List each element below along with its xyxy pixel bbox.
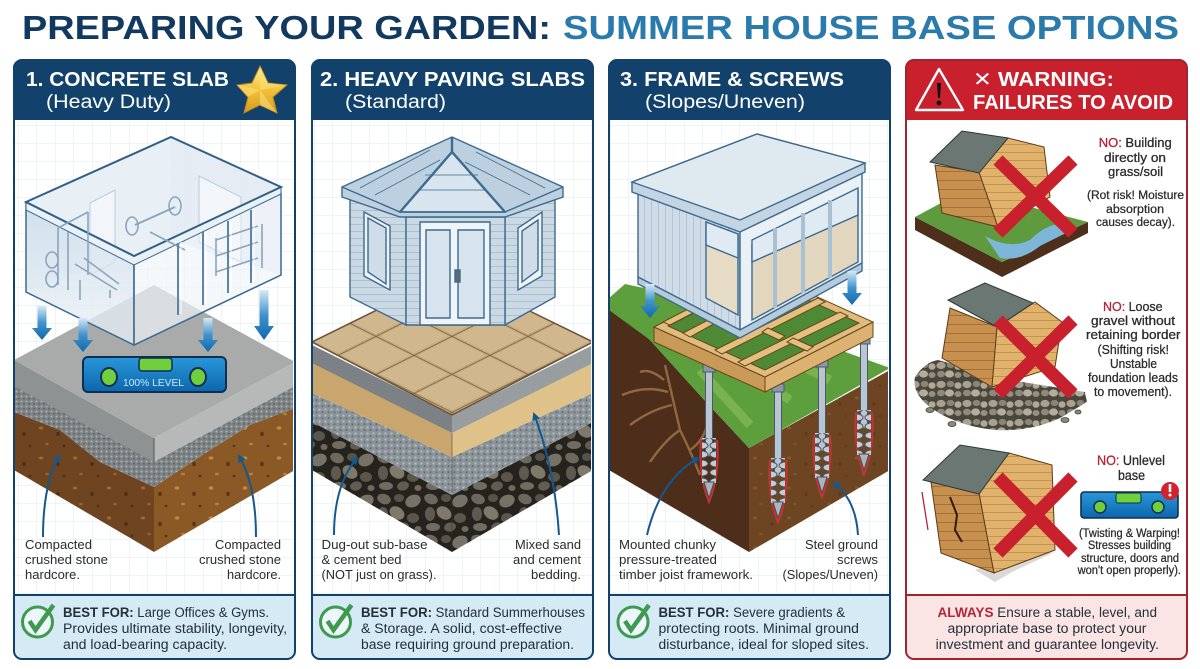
- text: failure two: retaining border: [1086, 327, 1181, 342]
- icon: green check: [618, 605, 649, 637]
- heading: paving slabs: (Standard): [345, 92, 446, 113]
- footer: always: investment and guarantee longevity.: [936, 637, 1159, 653]
- heading: frame and screws: 3. FRAME & SCREWS: [620, 69, 844, 91]
- footer: best for: base requiring ground preparation.: [361, 637, 574, 653]
- text: failure two: Unstable: [1110, 357, 1157, 371]
- panel: warning failures: [906, 60, 1187, 659]
- text: failure one: absorption: [1106, 204, 1164, 216]
- text: failure three heading: NO: Unlevel: [1097, 452, 1170, 468]
- footer: best for: [609, 595, 890, 659]
- illustration: corner summerhouse: [342, 137, 563, 325]
- callout arrows: [334, 414, 559, 535]
- text: right callout: screws: [837, 552, 879, 567]
- footer: best for: BEST FOR: Standard Summerhouses: [361, 605, 597, 621]
- title: [22, 9, 1179, 46]
- text: failure one: grass/soil: [1108, 164, 1163, 179]
- illustration: shed on loose gravel: [914, 283, 1087, 430]
- text: failure one: causes decay).: [1096, 217, 1175, 229]
- illustration: timber frame: [654, 272, 873, 392]
- panel: heavy paving slabs: [311, 60, 593, 659]
- icon: gold star: [237, 66, 287, 113]
- text: left callout: timber joist framework.: [619, 567, 753, 582]
- icon: unlevel spirit level: [1081, 482, 1179, 518]
- footer: best for: BEST FOR: Large Offices & Gyms.: [63, 605, 280, 621]
- illustration: ground screws: [700, 332, 873, 522]
- text: failure three: structure, doors and: [1081, 553, 1179, 565]
- text: failure two: to movement).: [1094, 385, 1172, 399]
- text: failure one: [1087, 135, 1184, 229]
- text: failure one: (Rot risk! Moisture: [1087, 190, 1184, 202]
- footer: always: ALWAYS Ensure a stable, level, and: [938, 605, 1165, 621]
- callout arrows: [43, 456, 256, 537]
- heading: frame and screws: [608, 60, 890, 120]
- text: right callout: (Slopes/Uneven): [782, 567, 878, 582]
- callout arrows: [647, 458, 858, 535]
- heading: warning: FAILURES TO AVOID: [973, 92, 1173, 114]
- heading: warning: [906, 60, 1187, 120]
- back wall window and door: [90, 176, 241, 275]
- icon: red cross: [998, 320, 1073, 394]
- icon: green check: [22, 605, 54, 637]
- gym equipment: [46, 197, 262, 300]
- text: right callout: Compacted: [215, 537, 281, 552]
- text: left callout: (NOT just on grass).: [322, 567, 436, 582]
- text: right callout: and cement: [513, 552, 581, 567]
- text: failure three: won't open properly).: [1077, 565, 1181, 577]
- text: failure three: (Twisting & Warping!: [1079, 528, 1180, 540]
- text: right callout: hardcore.: [227, 567, 281, 582]
- illustration: flat roof garden room: [632, 134, 865, 338]
- heading: paving slabs: 2. HEAVY PAVING SLABS: [320, 69, 585, 91]
- illustration: concrete slab layers: [14, 285, 295, 552]
- text: failure three heading: base: [1118, 467, 1145, 483]
- text: left callout: hardcore.: [25, 567, 80, 582]
- title: SUMMER HOUSE BASE OPTIONS: [563, 9, 1179, 46]
- icon: green check: [320, 605, 352, 637]
- footer: always: [906, 595, 1187, 659]
- text: failure two: gravel without: [1091, 313, 1175, 328]
- text: left callout: Mounted chunky: [619, 537, 716, 552]
- illustration: paving layers: [313, 310, 591, 552]
- footer: best for: [312, 595, 593, 659]
- heading: concrete slab: (Heavy Duty): [46, 92, 171, 113]
- footer: best for: & Storage. A solid, cost-effective: [361, 621, 562, 637]
- icon: spirit level: 100% LEVEL: [123, 378, 184, 389]
- illustration: shed on grass: [915, 131, 1088, 277]
- panel: frame and screws: [608, 60, 890, 659]
- heading: paving slabs: [311, 60, 593, 120]
- panel: concrete slab: [13, 60, 295, 659]
- text: right callout: crushed stone: [199, 552, 281, 567]
- text: failure two: (Shifting risk!: [1098, 343, 1169, 357]
- text: right callout: Steel ground: [805, 537, 878, 552]
- text: right callout: Mixed sand: [515, 537, 581, 552]
- icon: red cross: [998, 477, 1073, 553]
- heading: frame and screws: (Slopes/Uneven): [645, 92, 805, 113]
- text: left callout: pressure-treated: [619, 552, 717, 567]
- footer: best for: disturbance, ideal for sloped sites.: [658, 637, 869, 653]
- icon: warning triangle: [916, 69, 963, 110]
- text: left callout: Dug-out sub-base: [322, 537, 428, 552]
- footer: always: appropriate base to protect your: [948, 621, 1147, 637]
- glass mullions: [178, 210, 251, 315]
- heading: concrete slab: 1. CONCRETE SLAB: [26, 69, 229, 91]
- illustration: shed on unlevel base: [922, 445, 1055, 582]
- footer: best for: and load-bearing capacity.: [63, 637, 227, 653]
- footer: best for: [14, 595, 295, 659]
- text: failure two: foundation leads: [1088, 371, 1178, 385]
- illustration: sloped ground: [609, 284, 890, 552]
- footer: best for: protecting roots. Minimal ground: [658, 621, 859, 637]
- text: failure three: Stresses building: [1088, 540, 1171, 552]
- text: failure one: directly on: [1104, 150, 1166, 165]
- text: failure two: NO: Loose: [1103, 299, 1164, 314]
- text: left callout: Compacted: [25, 537, 92, 552]
- heading: concrete slab: [13, 60, 295, 120]
- footer: best for: BEST FOR: Severe gradients &: [658, 605, 854, 621]
- text: left callout: crushed stone: [25, 552, 108, 567]
- text: left callout: & cement bed: [322, 552, 402, 567]
- arrows: downward placement: [32, 290, 274, 352]
- heading: warning: ✕ WARNING:: [973, 69, 1114, 91]
- icon: red cross: [998, 160, 1073, 233]
- title: PREPARING YOUR GARDEN:: [22, 9, 551, 46]
- text: right callout: bedding.: [531, 567, 581, 582]
- illustration: glass gym building: [26, 137, 281, 345]
- text: failure two: [1086, 299, 1181, 399]
- text: failure one: NO: Building: [1099, 135, 1172, 150]
- footer: best for: Provides ultimate stability, longevity,: [63, 621, 287, 637]
- arrows: downward placement: [640, 271, 862, 318]
- icon: spirit level: [83, 357, 226, 392]
